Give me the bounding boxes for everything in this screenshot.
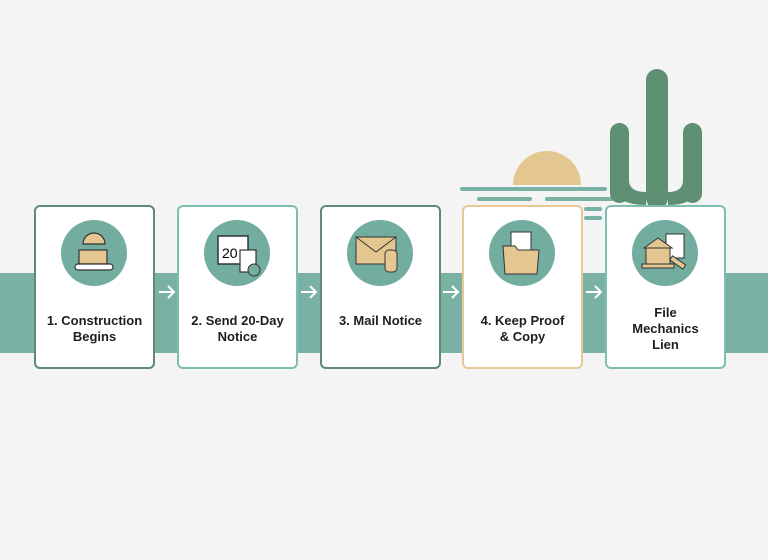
icon: envelope (347, 220, 413, 286)
label: 3. Mail Notice (339, 313, 422, 328)
label: Lien (652, 337, 679, 352)
icon: calendar (204, 220, 270, 286)
label: Notice (218, 329, 257, 344)
icon: courthouse (632, 220, 698, 286)
background band (0, 273, 768, 353)
step 2 card (177, 205, 298, 369)
label: Begins (73, 329, 116, 344)
step 1 card (34, 205, 155, 369)
icon: construction (61, 220, 127, 286)
arrow (301, 285, 318, 299)
label (480, 313, 564, 344)
label (632, 305, 699, 352)
arrow (443, 285, 460, 299)
label: File (654, 305, 677, 320)
label (191, 313, 284, 344)
icon: folder (489, 220, 555, 286)
label: 2. Send 20-Day (191, 313, 284, 328)
step 5 card (605, 205, 726, 369)
label (47, 313, 142, 344)
arrow (159, 285, 176, 299)
label: & Copy (500, 329, 545, 344)
label: 4. Keep Proof (481, 313, 564, 328)
illustration: cactus (610, 69, 702, 209)
step 3 card (320, 205, 441, 369)
icon: calendar: 20 (222, 245, 238, 261)
label: 1. Construction (47, 313, 142, 328)
arrow (586, 285, 602, 299)
step 4 card (462, 205, 583, 369)
label: Mechanics (632, 321, 699, 336)
